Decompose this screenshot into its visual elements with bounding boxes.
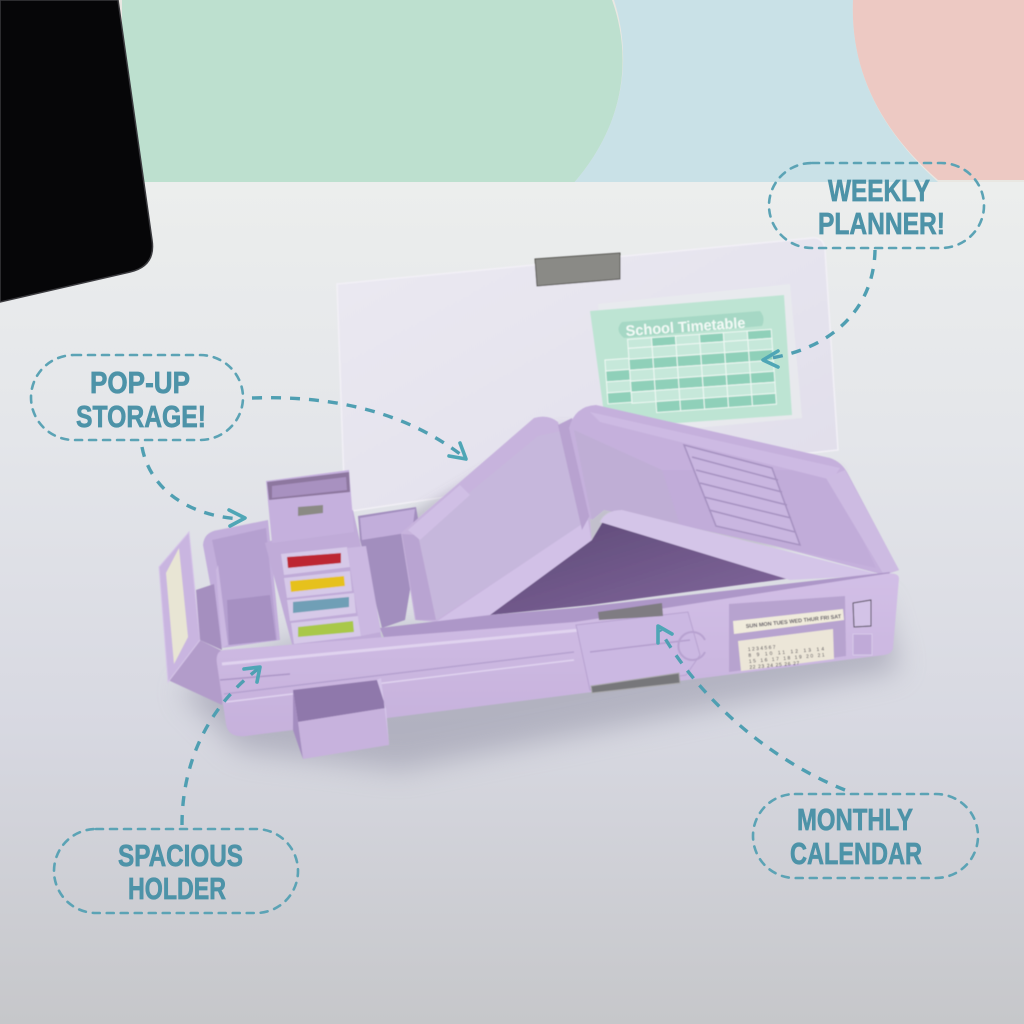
bottom hinge metal — [591, 673, 680, 693]
arrow: pop-up storage to tray — [252, 398, 466, 459]
hinge — [558, 418, 590, 530]
front wall — [217, 574, 899, 736]
timetable card — [590, 284, 802, 436]
top hinge metal — [598, 603, 663, 620]
dark interior — [490, 520, 792, 615]
drawer button blue — [287, 593, 356, 621]
callout: spacious holder: SPACIOUS — [118, 838, 243, 873]
callout: weekly planner — [769, 163, 984, 248]
arrow: spacious holder — [182, 667, 260, 825]
inner lip of front wall — [380, 572, 890, 640]
callout: pop-up storage: POP-UP — [90, 365, 190, 400]
pencil case body — [159, 405, 899, 759]
side slider — [853, 600, 872, 655]
tablet silhouette — [0, 0, 153, 302]
pop-up storage tower — [265, 470, 382, 648]
timetable title: School Timetable — [625, 315, 746, 340]
callout: monthly calendar: MONTHLY — [797, 802, 913, 837]
hinged left tray — [401, 417, 592, 622]
wall backdrop — [0, 0, 1024, 190]
calendar window: SUN MON TUES WED THUR FRI SAT — [746, 614, 842, 630]
callout: weekly planner: PLANNER! — [818, 206, 945, 241]
drawer button yellow — [284, 571, 352, 598]
callout: spacious holder: HOLDER — [128, 871, 226, 906]
left compartment — [203, 520, 280, 648]
calendar dates: 8 9 10 11 12 13 14 — [748, 646, 825, 659]
callout: weekly planner: WEEKLY — [828, 173, 930, 208]
calendar dates: 1 2 3 4 5 6 7 — [748, 645, 776, 653]
callout: pop-up storage — [31, 355, 243, 440]
pull-out drawer — [293, 678, 389, 759]
timetable grid — [604, 329, 776, 416]
arrow: monthly calendar — [658, 626, 845, 790]
callout: monthly calendar — [753, 794, 978, 878]
metal clasp — [535, 253, 620, 286]
arrow: pop-up storage to tower — [142, 447, 245, 526]
drawer button green — [291, 616, 361, 644]
side flap with label — [159, 532, 224, 705]
drawer button red — [281, 547, 350, 575]
calendar dates: 15 16 17 18 19 20 21 — [749, 652, 825, 665]
shadow on lid — [400, 425, 840, 590]
hinged right tray — [569, 405, 899, 580]
calendar dates — [748, 640, 826, 671]
rear wall centre — [358, 507, 420, 628]
open lid with timetable — [337, 238, 838, 512]
pen rest ridges — [684, 445, 800, 545]
callout: spacious holder — [54, 829, 298, 913]
callout: pop-up storage: STORAGE! — [76, 399, 206, 434]
case shadow — [180, 600, 900, 770]
calendar window — [729, 596, 846, 672]
arrow: weekly planner — [763, 250, 875, 367]
callout: monthly calendar: CALENDAR — [790, 836, 922, 871]
calendar dates: 22 23 24 25 26 27 — [749, 661, 800, 671]
tower top box — [266, 470, 354, 543]
